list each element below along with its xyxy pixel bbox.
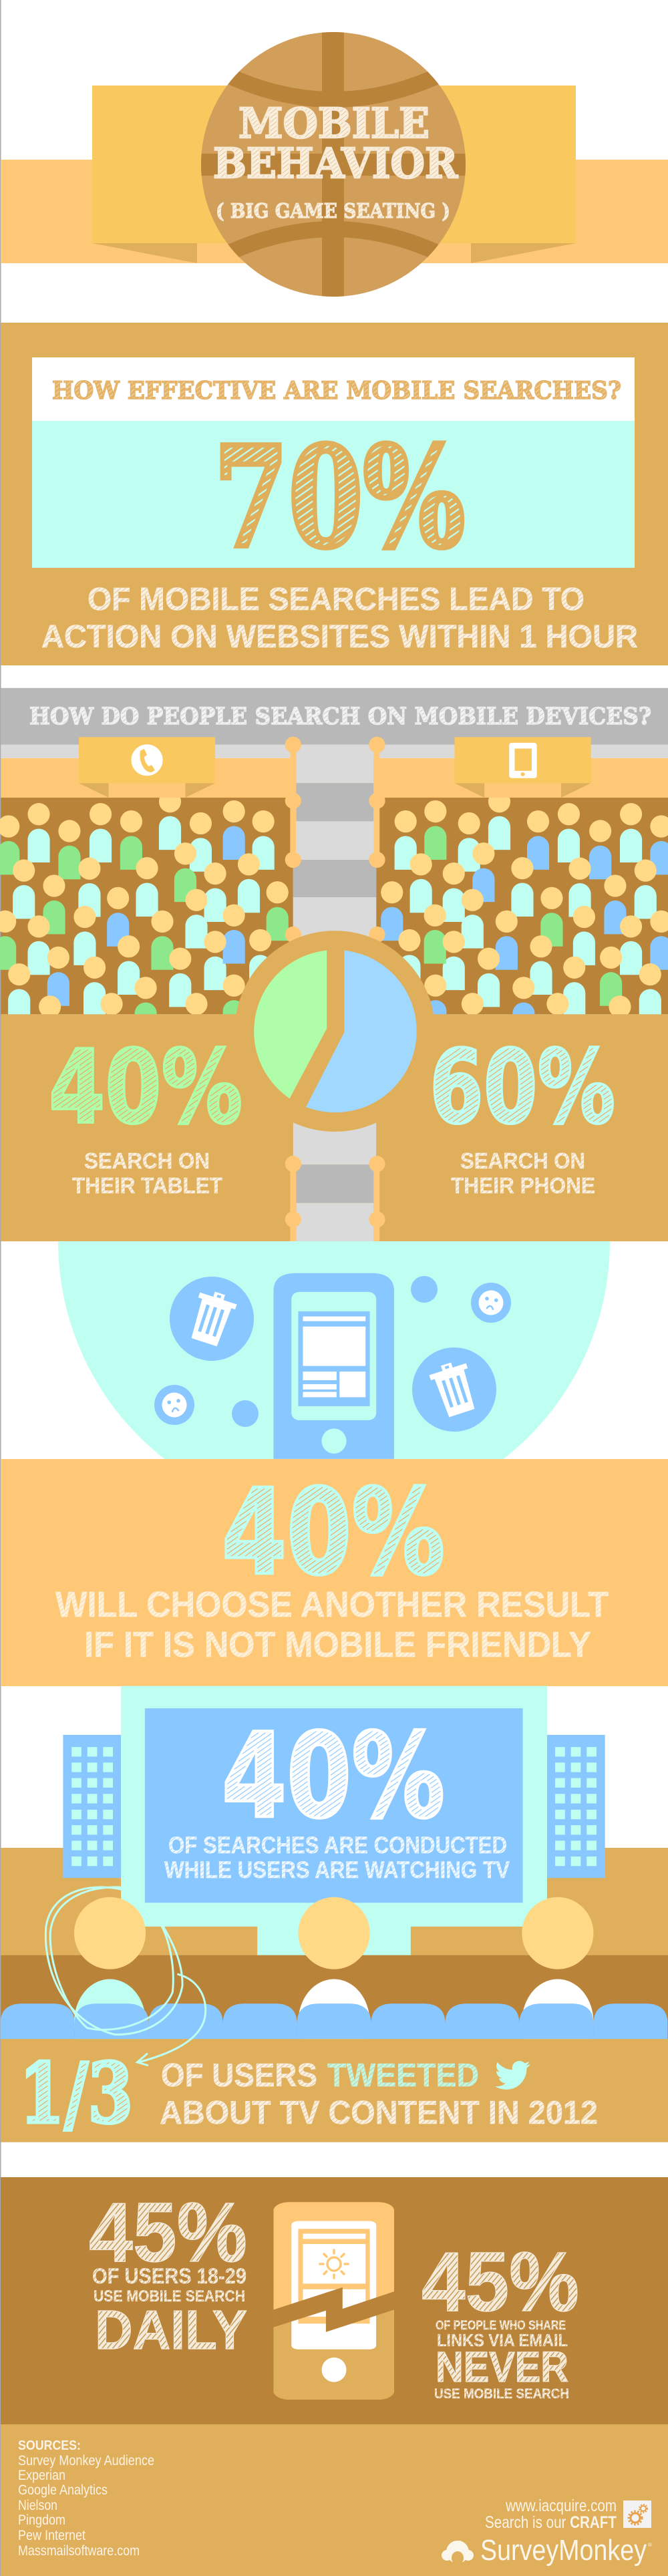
sources: Nielson: [18, 2498, 57, 2513]
icon: handset: [140, 749, 155, 772]
stat: 40%: 40%: [222, 1464, 445, 1601]
pie chart: 40 / 60: [236, 931, 434, 1132]
stat: 40% on screen: 40%: [222, 1709, 445, 1844]
icon: iacquire gears logo: [623, 2501, 651, 2528]
iacquire credit: www.iacquire.com: [505, 2497, 617, 2515]
stat: 45% daily: USE MOBILE SEARCH: [94, 2287, 245, 2305]
panel: footer: [1, 2424, 668, 2576]
sources: Experian: [18, 2468, 65, 2483]
title: [213, 99, 458, 223]
brown row: [1, 1955, 668, 2039]
icon: sad face right: [477, 1289, 505, 1317]
label: phone: SEARCH ON: [460, 1148, 585, 1173]
sources: SOURCES:: [18, 2438, 81, 2453]
description: IF IT IS NOT MOBILE FRIENDLY: [84, 1625, 591, 1665]
seats: [1, 2003, 667, 2039]
label: tablet: SEARCH ON: [84, 1148, 210, 1173]
tweet copy: [160, 2058, 598, 2131]
stadium illustration: [0, 688, 668, 1241]
theater illustration: [1, 1686, 668, 2142]
stat: 45% never: LINKS VIA EMAIL: [437, 2330, 568, 2350]
icon: sun: [320, 2250, 348, 2278]
sketch loop and arrow: [45, 1887, 206, 2065]
title: BEHAVIOR: [213, 139, 458, 188]
rails: [285, 737, 385, 1241]
icon: phone with web page: [273, 1273, 394, 1459]
description: [164, 1832, 510, 1883]
header: basketball ribbon title: [1, 32, 668, 297]
person: center: [298, 1897, 370, 2065]
label: phone: [451, 1148, 595, 1198]
tweet copy: ABOUT TV CONTENT IN 2012: [160, 2095, 598, 2131]
seating block left: [1, 798, 293, 1014]
label: tablet: [72, 1148, 222, 1198]
sources: Survey Monkey Audience: [18, 2453, 154, 2468]
description: [41, 582, 638, 655]
description: WILL CHOOSE ANOTHER RESULT: [55, 1585, 609, 1625]
orange band: [1, 160, 668, 263]
icon: trash can left: [159, 1266, 265, 1372]
stat: 70%: 70%: [214, 416, 465, 579]
iacquire credit: [485, 2497, 617, 2532]
lower tan panel: [1, 1014, 668, 1241]
stat: 45% never: [422, 2235, 579, 2402]
label: tablet: THEIR TABLET: [72, 1173, 222, 1198]
teal bowl backdrop: [58, 1241, 610, 1459]
panel: mobile friendly: [1, 965, 668, 1686]
icon: twitter bird: [495, 2061, 530, 2090]
lower stairs: [293, 1122, 376, 1241]
stat: 45% daily: [89, 2185, 247, 2361]
side building left: [63, 1735, 121, 1878]
description: OF SEARCHES ARE CONDUCTED: [168, 1832, 507, 1859]
label: phone: THEIR PHONE: [451, 1173, 595, 1198]
seating block right: [376, 798, 668, 1014]
icon: decorative dots and sad faces: [154, 1276, 511, 1427]
description: ACTION ON WEBSITES WITHIN 1 HOUR: [41, 619, 638, 655]
person: highlighted: [74, 1897, 146, 2065]
tan lower band: [1, 2039, 668, 2142]
title: ( BIG GAME SEATING ): [216, 200, 450, 223]
tweet copy: TWEETED: [327, 2058, 479, 2094]
crowd right: [381, 790, 668, 1036]
panel: how effective are mobile searches: [1, 323, 668, 665]
sources: Google Analytics: [18, 2482, 108, 2498]
sources: Pew Internet: [18, 2528, 86, 2543]
stat: 45% daily: DAILY: [95, 2299, 247, 2361]
stat: 45% daily: 45%: [89, 2185, 247, 2279]
sources: Pingdom: [18, 2513, 65, 2528]
stat: 45% never: NEVER: [436, 2343, 568, 2391]
tweet copy: OF USERS: [161, 2058, 317, 2094]
description: OF MOBILE SEARCHES LEAD TO: [88, 582, 584, 617]
ribbon: tablet: [455, 737, 591, 798]
stat: 45% never: OF PEOPLE WHO SHARE: [436, 2319, 566, 2333]
sources: [18, 2438, 154, 2559]
panel: watching tv: [1, 1686, 668, 2142]
stat: 45% daily: OF USERS 18-29: [92, 2264, 246, 2288]
heading: HOW EFFECTIVE ARE MOBILE SEARCHES?: [52, 377, 621, 405]
theater wall: [1, 1848, 668, 1955]
panel: 45 percent stats: [1, 2177, 668, 2424]
stat: 1/3: 1/3: [19, 2046, 133, 2142]
icon: trash can right: [401, 1337, 507, 1442]
description: WHILE USERS ARE WATCHING TV: [164, 1857, 510, 1883]
stat: 40% tablet: 40%: [49, 1028, 242, 1146]
logo: SurveyMonkey: ®: [648, 2542, 652, 2548]
ribbon: phone: [79, 737, 215, 798]
orange stat band: [1, 1459, 668, 1686]
person: right: [522, 1897, 593, 2065]
icon: broken phone: [273, 2202, 394, 2400]
ribbon: [92, 86, 576, 263]
icon: basketball: [200, 32, 468, 297]
panel: how do people search on mobile devices: [0, 688, 668, 1241]
tv screen: [145, 1708, 523, 1903]
side building right: [547, 1735, 605, 1878]
iacquire credit: Search is our CRAFT: [485, 2513, 617, 2532]
aisle stairs: [293, 745, 376, 1020]
tv frame: [121, 1686, 547, 1955]
stat: 45% never: USE MOBILE SEARCH: [434, 2386, 569, 2402]
crowd left: [0, 790, 289, 1036]
stat: 45% never: 45%: [422, 2235, 579, 2329]
sources: Massmailsoftware.com: [18, 2543, 140, 2559]
icon: sad face left: [160, 1391, 188, 1419]
title: MOBILE: [238, 99, 430, 148]
stat: 60% phone: 60%: [430, 1028, 615, 1146]
description: [55, 1585, 609, 1665]
